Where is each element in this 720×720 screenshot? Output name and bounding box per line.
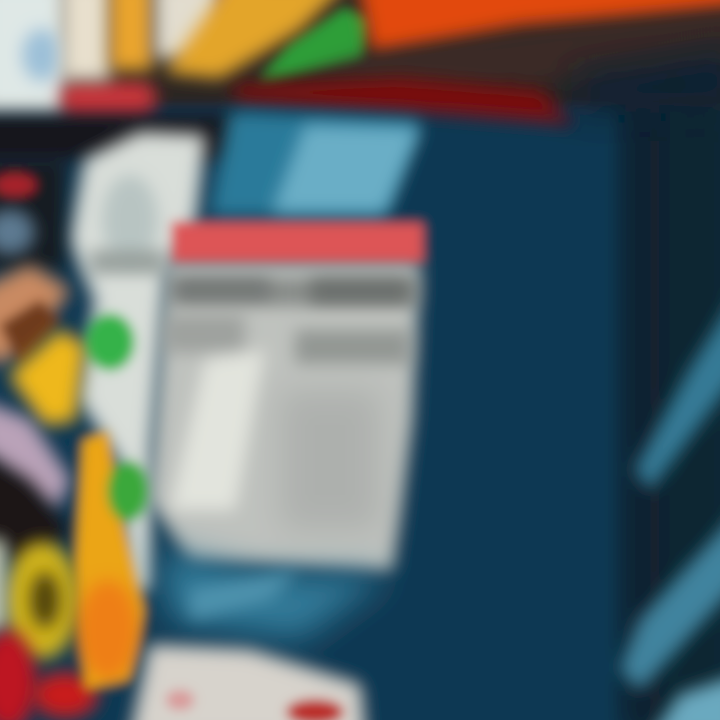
label body	[150, 262, 420, 570]
right light blue streaks	[620, 290, 720, 720]
label dark text bands	[165, 278, 417, 364]
icon: green circle upper	[86, 314, 134, 370]
icon: green circle lower	[108, 461, 148, 521]
label red header	[172, 222, 424, 262]
dark gap under shelf	[0, 114, 240, 160]
white side package	[70, 132, 205, 590]
lower blue panel streaks	[160, 550, 390, 640]
top shelf: colourful packages	[0, 0, 720, 124]
label highlight	[170, 350, 265, 510]
yellow orange stripe	[75, 430, 145, 690]
left stacked packages	[0, 160, 97, 720]
bottom white package	[130, 645, 365, 720]
nutrition label	[150, 222, 424, 570]
light blue panel highlight	[210, 112, 420, 215]
